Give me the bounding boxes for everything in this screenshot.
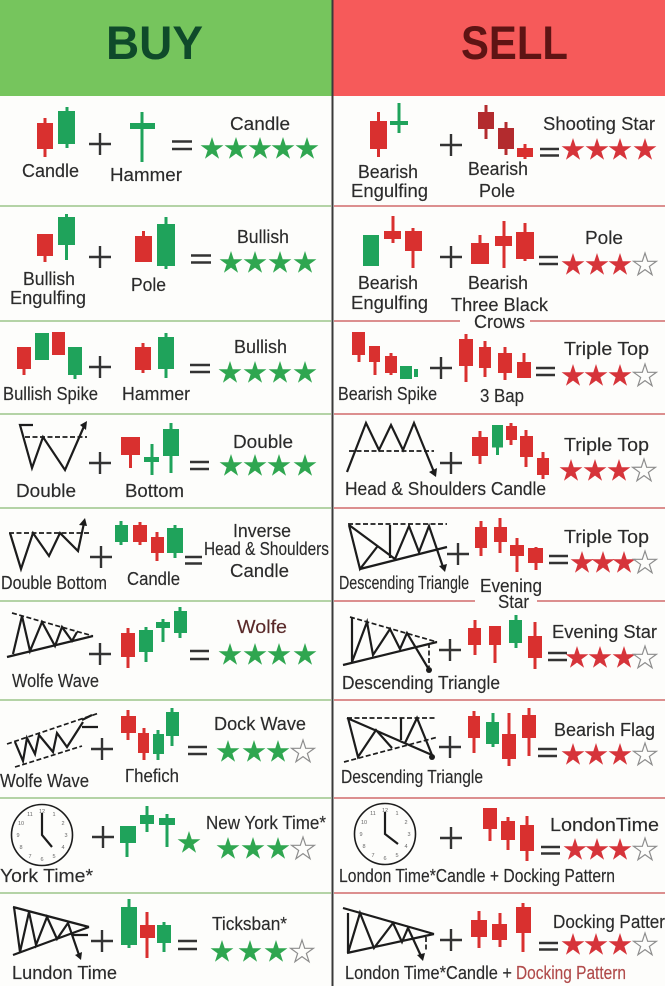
SELL row 9: London Time + candles = Docking Pattern, three stars	[343, 903, 665, 983]
label: Hammer: Hammer	[110, 165, 182, 185]
label: Bearish Three Black Crows	[451, 273, 549, 332]
chart: falling wedge with arrow	[343, 908, 434, 961]
label: 3 Bap: 3 Bap	[480, 386, 524, 406]
plus	[440, 134, 462, 156]
equals	[540, 149, 559, 156]
label: Bearish Pole: Bearish	[468, 159, 528, 179]
equals	[190, 462, 209, 469]
equals	[539, 943, 558, 950]
candles: mixed set	[121, 708, 179, 760]
header: SELL: SELL	[461, 16, 568, 69]
chart: descending triangle	[344, 718, 438, 762]
BUY row 6: Wolfe Wave + candles = Wolfe, four stars	[7, 607, 316, 691]
label: Evening Star: Star	[498, 592, 529, 612]
rating: Triple Top three stars: Triple Top	[564, 527, 649, 547]
label: Bearish Pole	[468, 159, 528, 201]
plus	[440, 452, 462, 474]
label: Гhefich: Гhefich	[125, 766, 179, 786]
icon: clock at four o'clock: 11	[370, 811, 376, 817]
label: Descending Triangle: Descending Triangle	[342, 673, 500, 693]
icon: clock at four o'clock: 12	[382, 808, 388, 814]
BUY row 8: York Time clock + candles = New York Time, three stars	[0, 804, 326, 886]
SELL row 7: Descending Triangle + candles = Bearish Flag, three stars	[341, 708, 656, 787]
plus	[89, 643, 111, 665]
icon: clock at four o'clock: 5	[395, 853, 399, 859]
rating: Docking Pattern three stars	[553, 912, 665, 955]
rating: Ticksban three stars	[211, 914, 313, 962]
plus	[91, 738, 113, 760]
rating: London Time three stars: LondonTime	[550, 815, 659, 835]
label: Hammer: Hammer	[122, 384, 190, 404]
icon: clock at four o'clock: 3	[407, 832, 411, 838]
plus	[440, 246, 462, 268]
SELL row 1: Bearish Engulfing + Bearish Pole = Shooting Star, four stars	[351, 103, 656, 201]
plus	[90, 546, 112, 568]
chart: falling wedge with arrow	[13, 907, 89, 960]
candles: bearish spike	[352, 332, 418, 379]
SELL row 8: London Time clock + candles = London Time, three stars	[339, 804, 659, 886]
candles: pole	[135, 217, 175, 269]
label: Evening Star: Evening	[480, 576, 542, 596]
rating: Double four stars: Double	[233, 432, 293, 452]
label: Bearish Engulfing: Engulfing	[351, 181, 428, 201]
icon: clock at four o'clock: 5	[52, 854, 56, 860]
SELL row 6: Descending Triangle + candles = Evening Star, three stars	[342, 615, 657, 693]
icon: clock at four o'clock: 10	[18, 821, 24, 827]
icon: clock at four o'clock: 9	[359, 832, 363, 838]
equals	[539, 257, 558, 264]
BUY row 7: Wolfe Wave + Гhefich = Dock Wave, three stars	[0, 708, 314, 791]
label: Descending Triangle: Descending Triangle	[341, 767, 483, 787]
rating: Double four stars	[220, 432, 316, 476]
BUY row 1: Candle + Hammer = Candle, five stars	[22, 107, 318, 185]
plus	[89, 452, 111, 474]
label: Bearish Engulfing: Engulfing	[351, 293, 428, 313]
label: Bullish Engulfing: Bullish	[23, 269, 75, 289]
label: Bearish Three Black Crows: Bearish	[468, 273, 528, 293]
label: Wolfe Wave: Wolfe Wave	[12, 671, 99, 691]
rating: Bearish Flag three stars	[554, 720, 656, 765]
candles: rising set	[121, 607, 187, 668]
candles: bearish engulfing	[370, 103, 408, 157]
SELL row 5: Descending Triangle + Evening Star = Triple Top, three stars	[339, 518, 656, 612]
candles: hammer pair	[135, 333, 174, 378]
BUY row 5: Double Bottom + Candle = Inverse Head & Shoulders Candle	[1, 518, 329, 593]
SELL row 3: Bearish Spike + 3 Bap = Triple Top, three stars	[338, 332, 656, 406]
rating: Bullish four stars: Bullish	[237, 227, 289, 247]
chart: falling wedge	[343, 617, 437, 673]
candles: three black crows	[471, 221, 534, 268]
label: Bullish Engulfing	[10, 269, 86, 308]
label: Bearish Spike: Bearish Spike	[338, 384, 437, 404]
candles: green red green	[121, 899, 171, 958]
equals	[172, 142, 192, 149]
icon: clock at four o'clock: 7	[28, 854, 32, 860]
label: Bearish Engulfing	[351, 273, 428, 313]
plus	[89, 133, 111, 155]
candles: arc of five	[472, 423, 549, 479]
label: Bearish Pole: Pole	[479, 181, 515, 201]
candles: four candles	[115, 521, 183, 561]
label: London Time Candle + Docking Pattern: London Time*Candle +	[345, 963, 512, 983]
equals	[536, 368, 555, 375]
icon: clock at four o'clock: 11	[27, 812, 33, 818]
label: Lundon Time: Lundon Time	[12, 963, 117, 983]
label: Double Bottom: Double Bottom	[1, 573, 107, 593]
rating: Shooting Star four stars: Shooting Star	[543, 114, 655, 134]
equals	[538, 749, 557, 756]
label: Descending Triangle: Descending Triangle	[339, 573, 469, 593]
text: Inverse Head and Shoulders Candle	[204, 521, 329, 581]
rating: Dock Wave three stars: Dock Wave	[214, 714, 306, 734]
icon: clock at four o'clock: 3	[64, 833, 68, 839]
text: Inverse Head and Shoulders Candle: Candle	[230, 561, 289, 581]
candles: evening star set	[468, 615, 542, 669]
equals	[541, 847, 560, 854]
candles: bullish engulfing	[37, 214, 75, 262]
candles: three red	[471, 903, 531, 952]
candles: bottom	[121, 423, 179, 475]
rating: Triple Top three stars	[562, 339, 656, 386]
rating: Triple Top three stars	[564, 527, 656, 573]
plus	[91, 930, 113, 952]
icon: clock at four o'clock: 4	[61, 845, 65, 851]
rating: Candle five stars	[201, 114, 318, 159]
chart: head and shoulders	[347, 423, 437, 477]
header: BUY	[0, 0, 332, 96]
candles: green set with star	[120, 806, 200, 857]
rating: Bullish four stars	[219, 337, 316, 383]
chart: wolfe wave	[7, 613, 93, 657]
chart: rising wedge	[7, 713, 99, 767]
icon: clock at four o'clock	[354, 804, 416, 864]
icon: clock at four o'clock: 8	[19, 845, 23, 851]
plus	[440, 929, 462, 951]
rating: Triple Top three stars	[560, 435, 655, 481]
rating: Wolfe four stars	[219, 617, 316, 665]
icon: clock at four o'clock: 1	[395, 811, 399, 817]
rating: Pole three stars	[562, 228, 656, 275]
label: Bottom: Bottom	[125, 481, 184, 501]
equals	[191, 256, 211, 262]
rating: Candle five stars: Candle	[230, 114, 290, 134]
SELL row 4: Head & Shoulders + Candle = Triple Top, three stars	[345, 423, 655, 499]
rating: New York Time three stars	[206, 813, 326, 859]
rating: Bullish four stars	[220, 227, 316, 273]
icon: clock at four o'clock: 2	[61, 821, 65, 827]
header: BUY: BUY	[106, 16, 203, 69]
icon: clock at four o'clock: 8	[362, 844, 366, 850]
rating: Evening Star three stars	[552, 622, 657, 668]
label: Candle: Candle	[22, 161, 79, 181]
chart: descending triangle	[348, 524, 447, 572]
rating: Evening Star three stars: Evening Star	[552, 622, 657, 642]
label: London Time Candle + Docking Pattern	[345, 963, 626, 983]
equals	[188, 747, 207, 754]
plus	[440, 827, 462, 849]
icon: clock at four o'clock: 6	[383, 856, 387, 862]
chart: double bottom	[20, 421, 87, 470]
label: Bullish Spike: Bullish Spike	[3, 384, 98, 404]
label: Bearish Engulfing: Bearish	[358, 162, 418, 182]
plus	[89, 356, 111, 378]
icon: clock at four o'clock: 1	[52, 812, 56, 818]
rating: Bullish four stars: Bullish	[234, 337, 287, 357]
label: Evening Star	[480, 576, 542, 612]
equals	[548, 653, 567, 660]
label: Bearish Three Black Crows: Crows	[474, 312, 525, 332]
candles: three red	[483, 808, 534, 861]
BUY row 3: Bullish Spike + Hammer = Bullish, four stars	[3, 332, 316, 404]
icon: clock at four o'clock: 4	[404, 844, 408, 850]
header: SELL	[333, 0, 665, 96]
candles: bearish pole	[478, 105, 533, 159]
plus	[439, 736, 461, 758]
label: Wolfe Wave: Wolfe Wave	[0, 771, 89, 791]
rating: London Time three stars	[550, 815, 659, 860]
text: Inverse Head and Shoulders Candle: Head & Shoulders	[204, 539, 329, 559]
rating: New York Time three stars: New York Time*	[206, 813, 326, 833]
equals	[190, 651, 209, 659]
rating: Bearish Flag three stars: Bearish Flag	[554, 720, 655, 740]
candles: 3 bap	[459, 334, 531, 382]
plus	[430, 357, 452, 379]
plus	[92, 826, 114, 848]
rating: Triple Top three stars: Triple Top	[564, 435, 649, 455]
label: Double: Double	[16, 481, 76, 501]
BUY row 2: Bullish Engulfing + Pole = Bullish, four stars	[10, 214, 316, 308]
equals	[190, 365, 210, 372]
equals	[549, 556, 568, 563]
icon: clock at four o'clock: 10	[361, 820, 367, 826]
rating: Ticksban three stars: Ticksban*	[212, 914, 287, 934]
label: London Time Candle + Docking Pattern: Docking Pattern	[516, 963, 626, 983]
label: York Time*: York Time*	[0, 866, 93, 886]
rating: Wolfe four stars: Wolfe	[237, 617, 287, 637]
rating: Triple Top three stars: Triple Top	[564, 339, 649, 359]
icon: clock at four o'clock: 12	[39, 809, 45, 815]
candles: bearish flag	[468, 708, 536, 766]
candles: evening star	[475, 518, 543, 572]
rating: Dock Wave three stars	[214, 714, 314, 762]
label: Pole: Pole	[131, 275, 166, 295]
plus	[439, 639, 461, 661]
icon: clock at four o'clock: 9	[16, 833, 20, 839]
text: Inverse Head and Shoulders Candle: Inverse	[233, 521, 291, 541]
candle: hammer	[130, 112, 155, 162]
label: Bearish Engulfing: Bearish	[358, 273, 418, 293]
rating: Shooting Star four stars	[543, 114, 656, 160]
plus	[447, 543, 469, 565]
label: Candle: Candle	[127, 569, 180, 589]
equals	[178, 941, 197, 949]
icon: clock at four o'clock: 7	[371, 853, 375, 859]
icon: clock at four o'clock: 2	[404, 820, 408, 826]
plus	[89, 246, 111, 268]
label: Bearish Engulfing	[351, 162, 428, 201]
candles: red and green	[37, 107, 75, 157]
BUY row 4: Double Bottom + candles = Double, four stars	[16, 421, 316, 501]
icon: clock at four o'clock: 6	[40, 857, 44, 863]
SELL row 2: Bearish Engulfing + Three Black Crows = Pole, three stars	[351, 216, 656, 332]
icon: clock at four o'clock	[12, 804, 72, 866]
rating: Pole three stars: Pole	[585, 228, 623, 248]
label: London Time Candle + Docking Pattern: London Time*Candle + Docking Pattern	[339, 866, 615, 886]
candles: green and two red	[363, 216, 422, 268]
label: Bearish Three Black Crows: Three Black	[451, 295, 549, 315]
chart: inverse head and shoulders	[9, 518, 90, 569]
BUY row 9: Lundon Time + candles = Ticksban, three stars	[12, 899, 313, 983]
equals	[185, 557, 202, 564]
candles: bullish spike	[17, 332, 82, 379]
label: Head & Shoulders Candle: Head & Shoulders Candle	[345, 479, 546, 499]
label: Bullish Engulfing: Engulfing	[10, 288, 86, 308]
